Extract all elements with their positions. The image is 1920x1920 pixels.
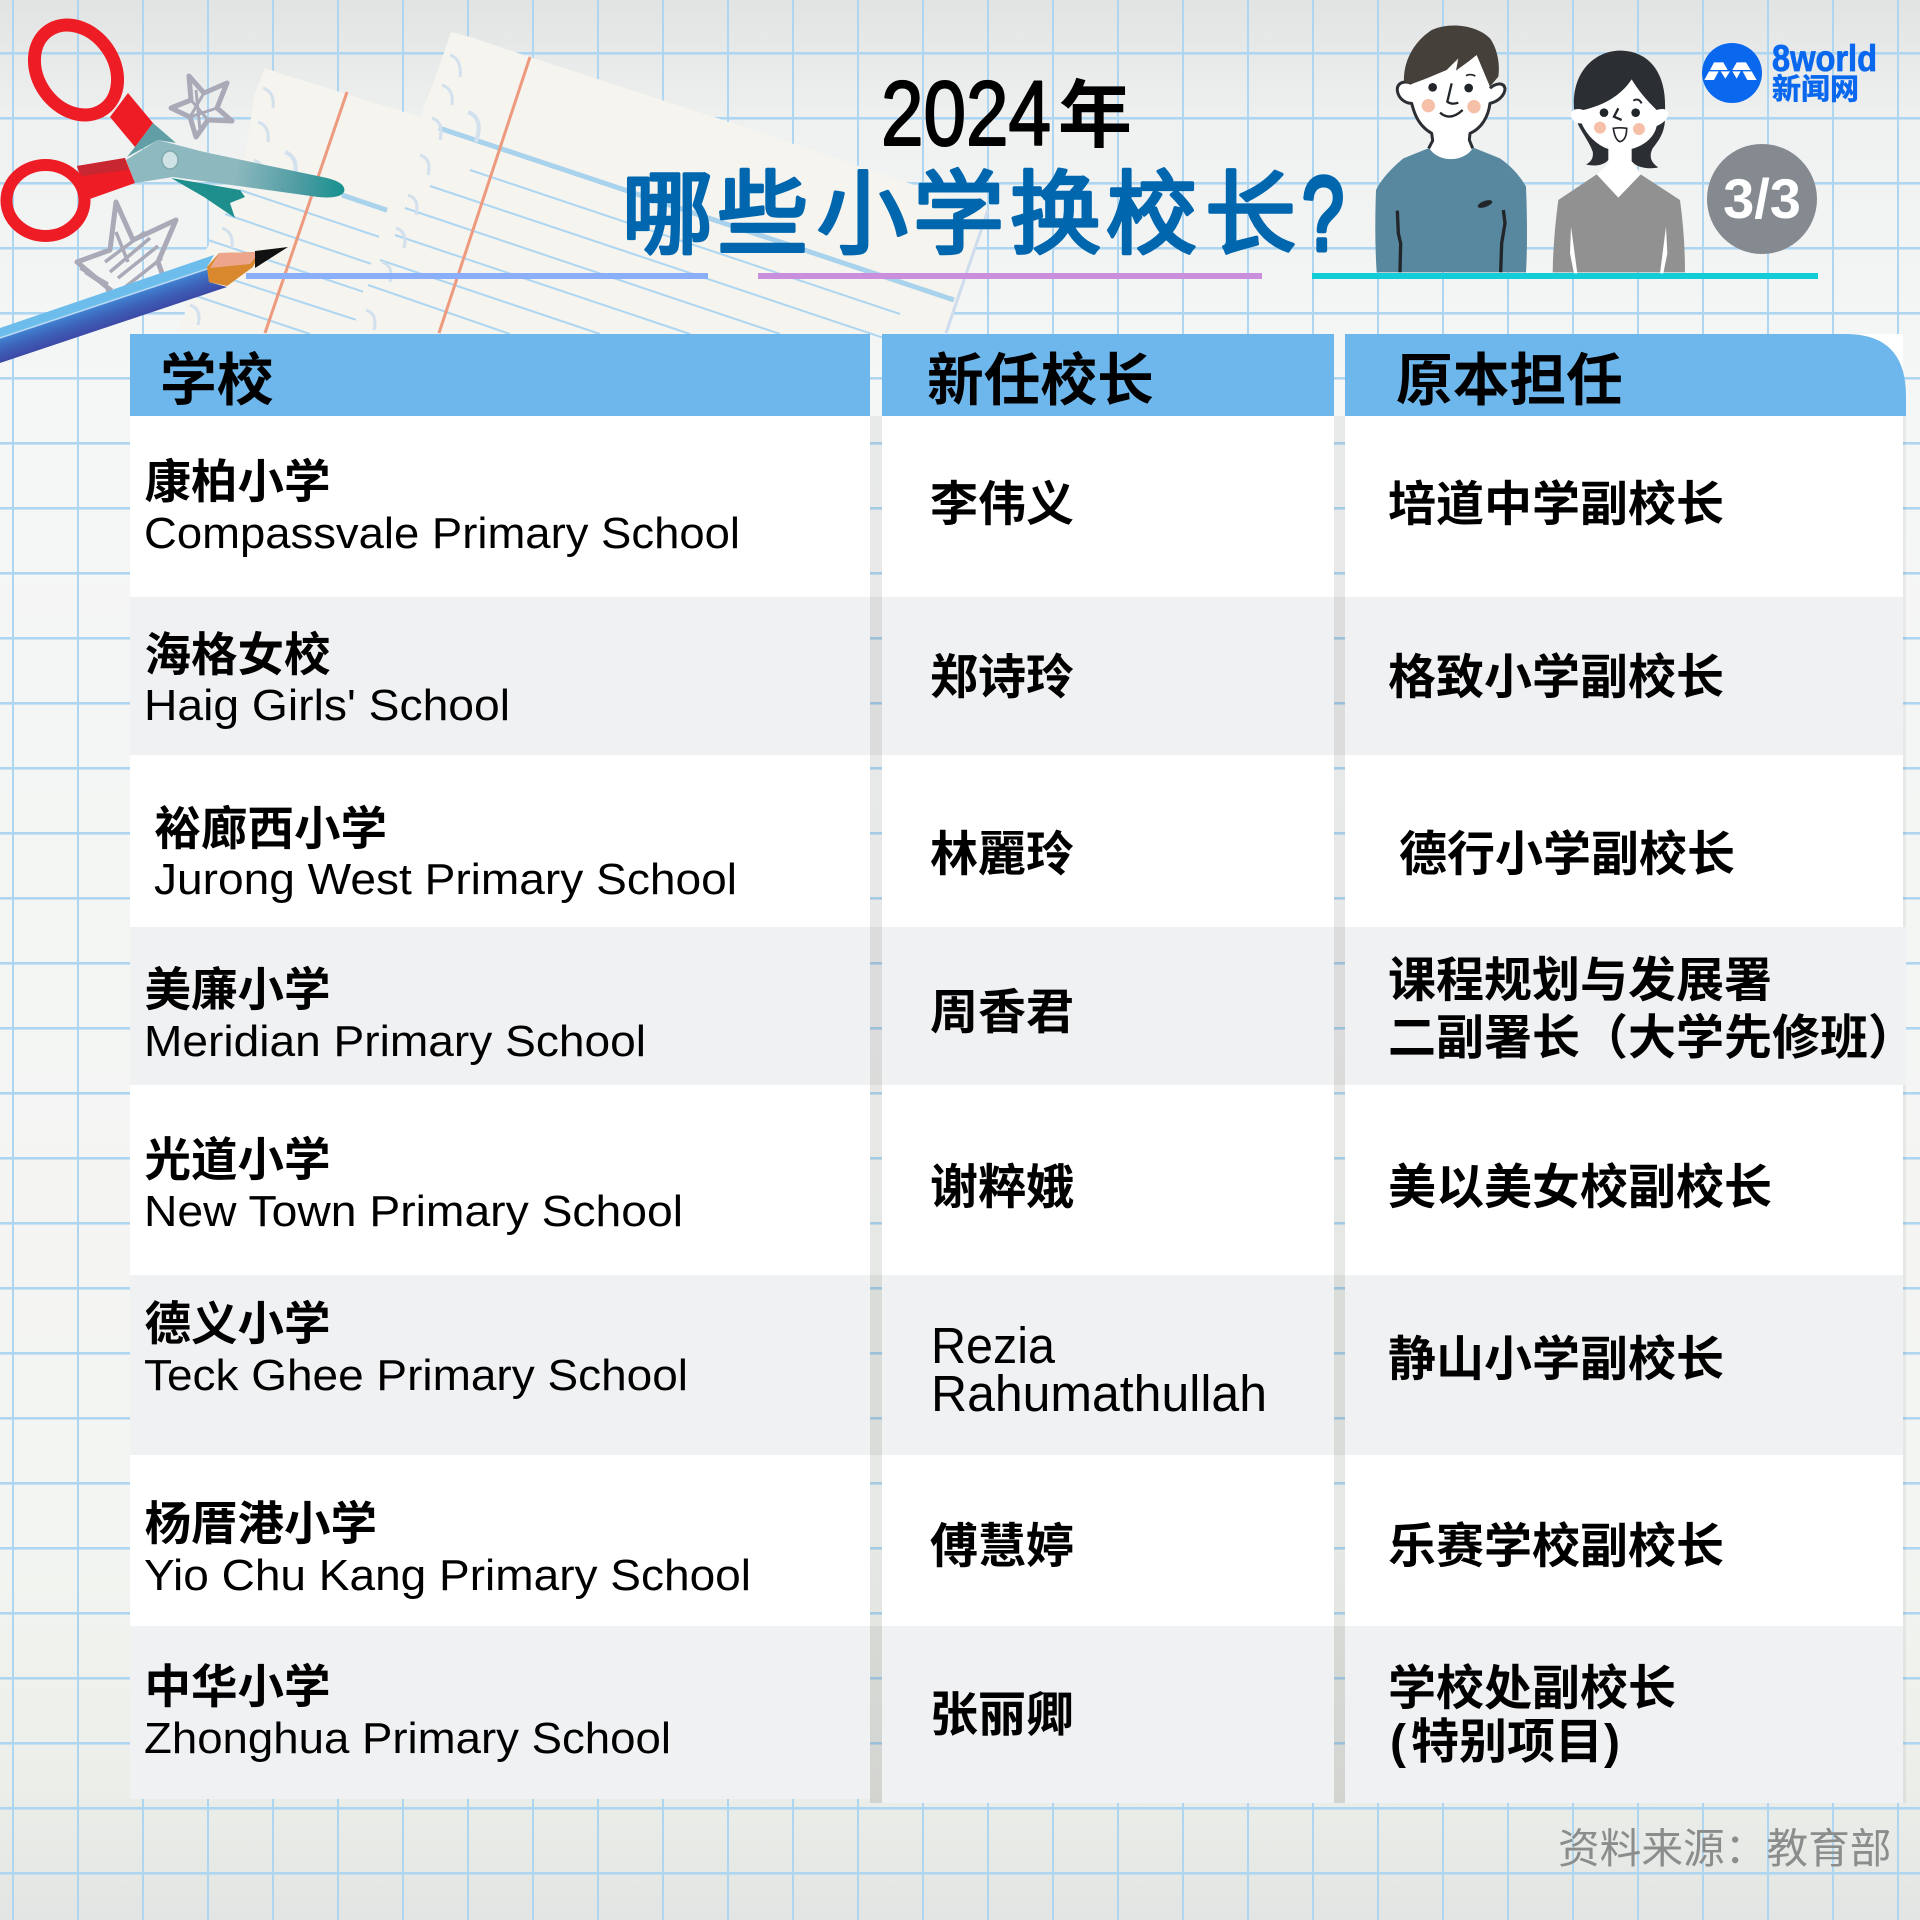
row: Zhonghua: Zhonghua Primary School (144, 1714, 671, 1763)
source note: 资料来源：教育部 (1558, 1825, 1892, 1872)
logo wordmark: 8world (1772, 38, 1877, 79)
row: Jurong West: 裕廊西小学 (154, 803, 387, 855)
row: Teck Ghee: Rahumathullah (931, 1365, 1267, 1422)
page badge 3/3: 3/3 (1723, 167, 1801, 230)
logo: 8world: 新闻网 (1772, 73, 1859, 106)
row: Compassvale: 李伟义 (930, 478, 1074, 532)
illustration: man (1375, 25, 1527, 272)
row: Compassvale: Compassvale Primary School (144, 509, 740, 558)
header row: 原本担任 (1396, 350, 1623, 413)
row: Zhonghua: 中华小学 (144, 1661, 330, 1713)
row: Compassvale: 康柏小学 (144, 456, 330, 508)
row: New Town: 美以美女校副校长 (1388, 1162, 1772, 1214)
row: Teck Ghee: Teck Ghee Primary School (144, 1351, 688, 1400)
row: Meridian: Meridian Primary School (144, 1017, 646, 1066)
row: Yio Chu Kang: 乐赛学校副校长 (1388, 1520, 1724, 1574)
row: Meridian (144, 954, 1916, 1066)
icon: scissors (6, 9, 344, 236)
row: Zhonghua: 张丽卿 (930, 1689, 1074, 1742)
row: Jurong West: 德行小学副校长 (1399, 828, 1735, 882)
heading underlines (246, 273, 1818, 279)
row: Compassvale (144, 456, 1724, 558)
icon: small star (171, 76, 232, 137)
row: Zhonghua (144, 1661, 1676, 1769)
row: Jurong West (154, 803, 1735, 904)
row: Haig Girls: 格致小学副校长 (1388, 652, 1724, 704)
row: New Town: 光道小学 (144, 1134, 330, 1186)
title line 2: 哪些小学换校长 (622, 165, 1296, 266)
row: Yio Chu Kang: 杨厝港小学 (144, 1498, 377, 1550)
logo: 8world (1702, 38, 1877, 106)
row: New Town (144, 1134, 1772, 1236)
logo mark (1702, 43, 1762, 103)
title (622, 63, 1344, 273)
row: Yio Chu Kang: Yio Chu Kang Primary School (144, 1551, 751, 1600)
row: Haig Girls: 郑诗玲 (930, 652, 1074, 704)
table (130, 334, 1916, 1803)
row: Haig Girls (144, 629, 1724, 730)
row: Haig Girls: Haig Girls' School (144, 681, 510, 730)
row: Yio Chu Kang: 傅慧婷 (930, 1520, 1074, 1574)
row: Compassvale: 培道中学副校长 (1388, 478, 1724, 532)
row backgrounds (130, 416, 1906, 1803)
icon: large star (77, 202, 176, 300)
header row (130, 334, 1906, 416)
row: Jurong West: 林麗玲 (930, 828, 1074, 882)
column gap shading (870, 416, 1906, 1803)
icon: pencil (0, 247, 288, 363)
row: Meridian: 美廉小学 (144, 964, 330, 1016)
header row: 新任校长 (927, 350, 1154, 413)
row: Teck Ghee: Rezia (931, 1317, 1056, 1374)
sheet right (352, 32, 988, 340)
row: Meridian: 二副署长（大学先修班） (1388, 1012, 1916, 1065)
row: Teck Ghee: 德义小学 (144, 1298, 330, 1350)
row: New Town: New Town Primary School (144, 1187, 683, 1236)
title: ? (1302, 156, 1344, 273)
row: Meridian: 周香君 (930, 986, 1074, 1040)
row: Teck Ghee (144, 1298, 1724, 1422)
title line 1: 2024 (881, 63, 1051, 165)
illustration: woman (1553, 51, 1685, 273)
header row: 学校 (160, 350, 273, 413)
row: Meridian: 课程规划与发展署 (1388, 954, 1772, 1008)
illustration: notebook paper sheets (178, 32, 988, 340)
row: Jurong West: Jurong West Primary School (154, 855, 737, 904)
row: Teck Ghee: 静山小学副校长 (1388, 1334, 1724, 1386)
row: Haig Girls: 海格女校 (144, 629, 330, 681)
sheet left (178, 68, 430, 334)
row: Yio Chu Kang (144, 1498, 1724, 1600)
row: Zhonghua: (特别项目) (1390, 1716, 1620, 1769)
page badge 3/3 (1707, 144, 1817, 254)
row: Zhonghua: 学校处副校长 (1388, 1662, 1676, 1716)
title: 年 (1058, 74, 1132, 157)
row: New Town: 谢粹娥 (930, 1162, 1074, 1214)
